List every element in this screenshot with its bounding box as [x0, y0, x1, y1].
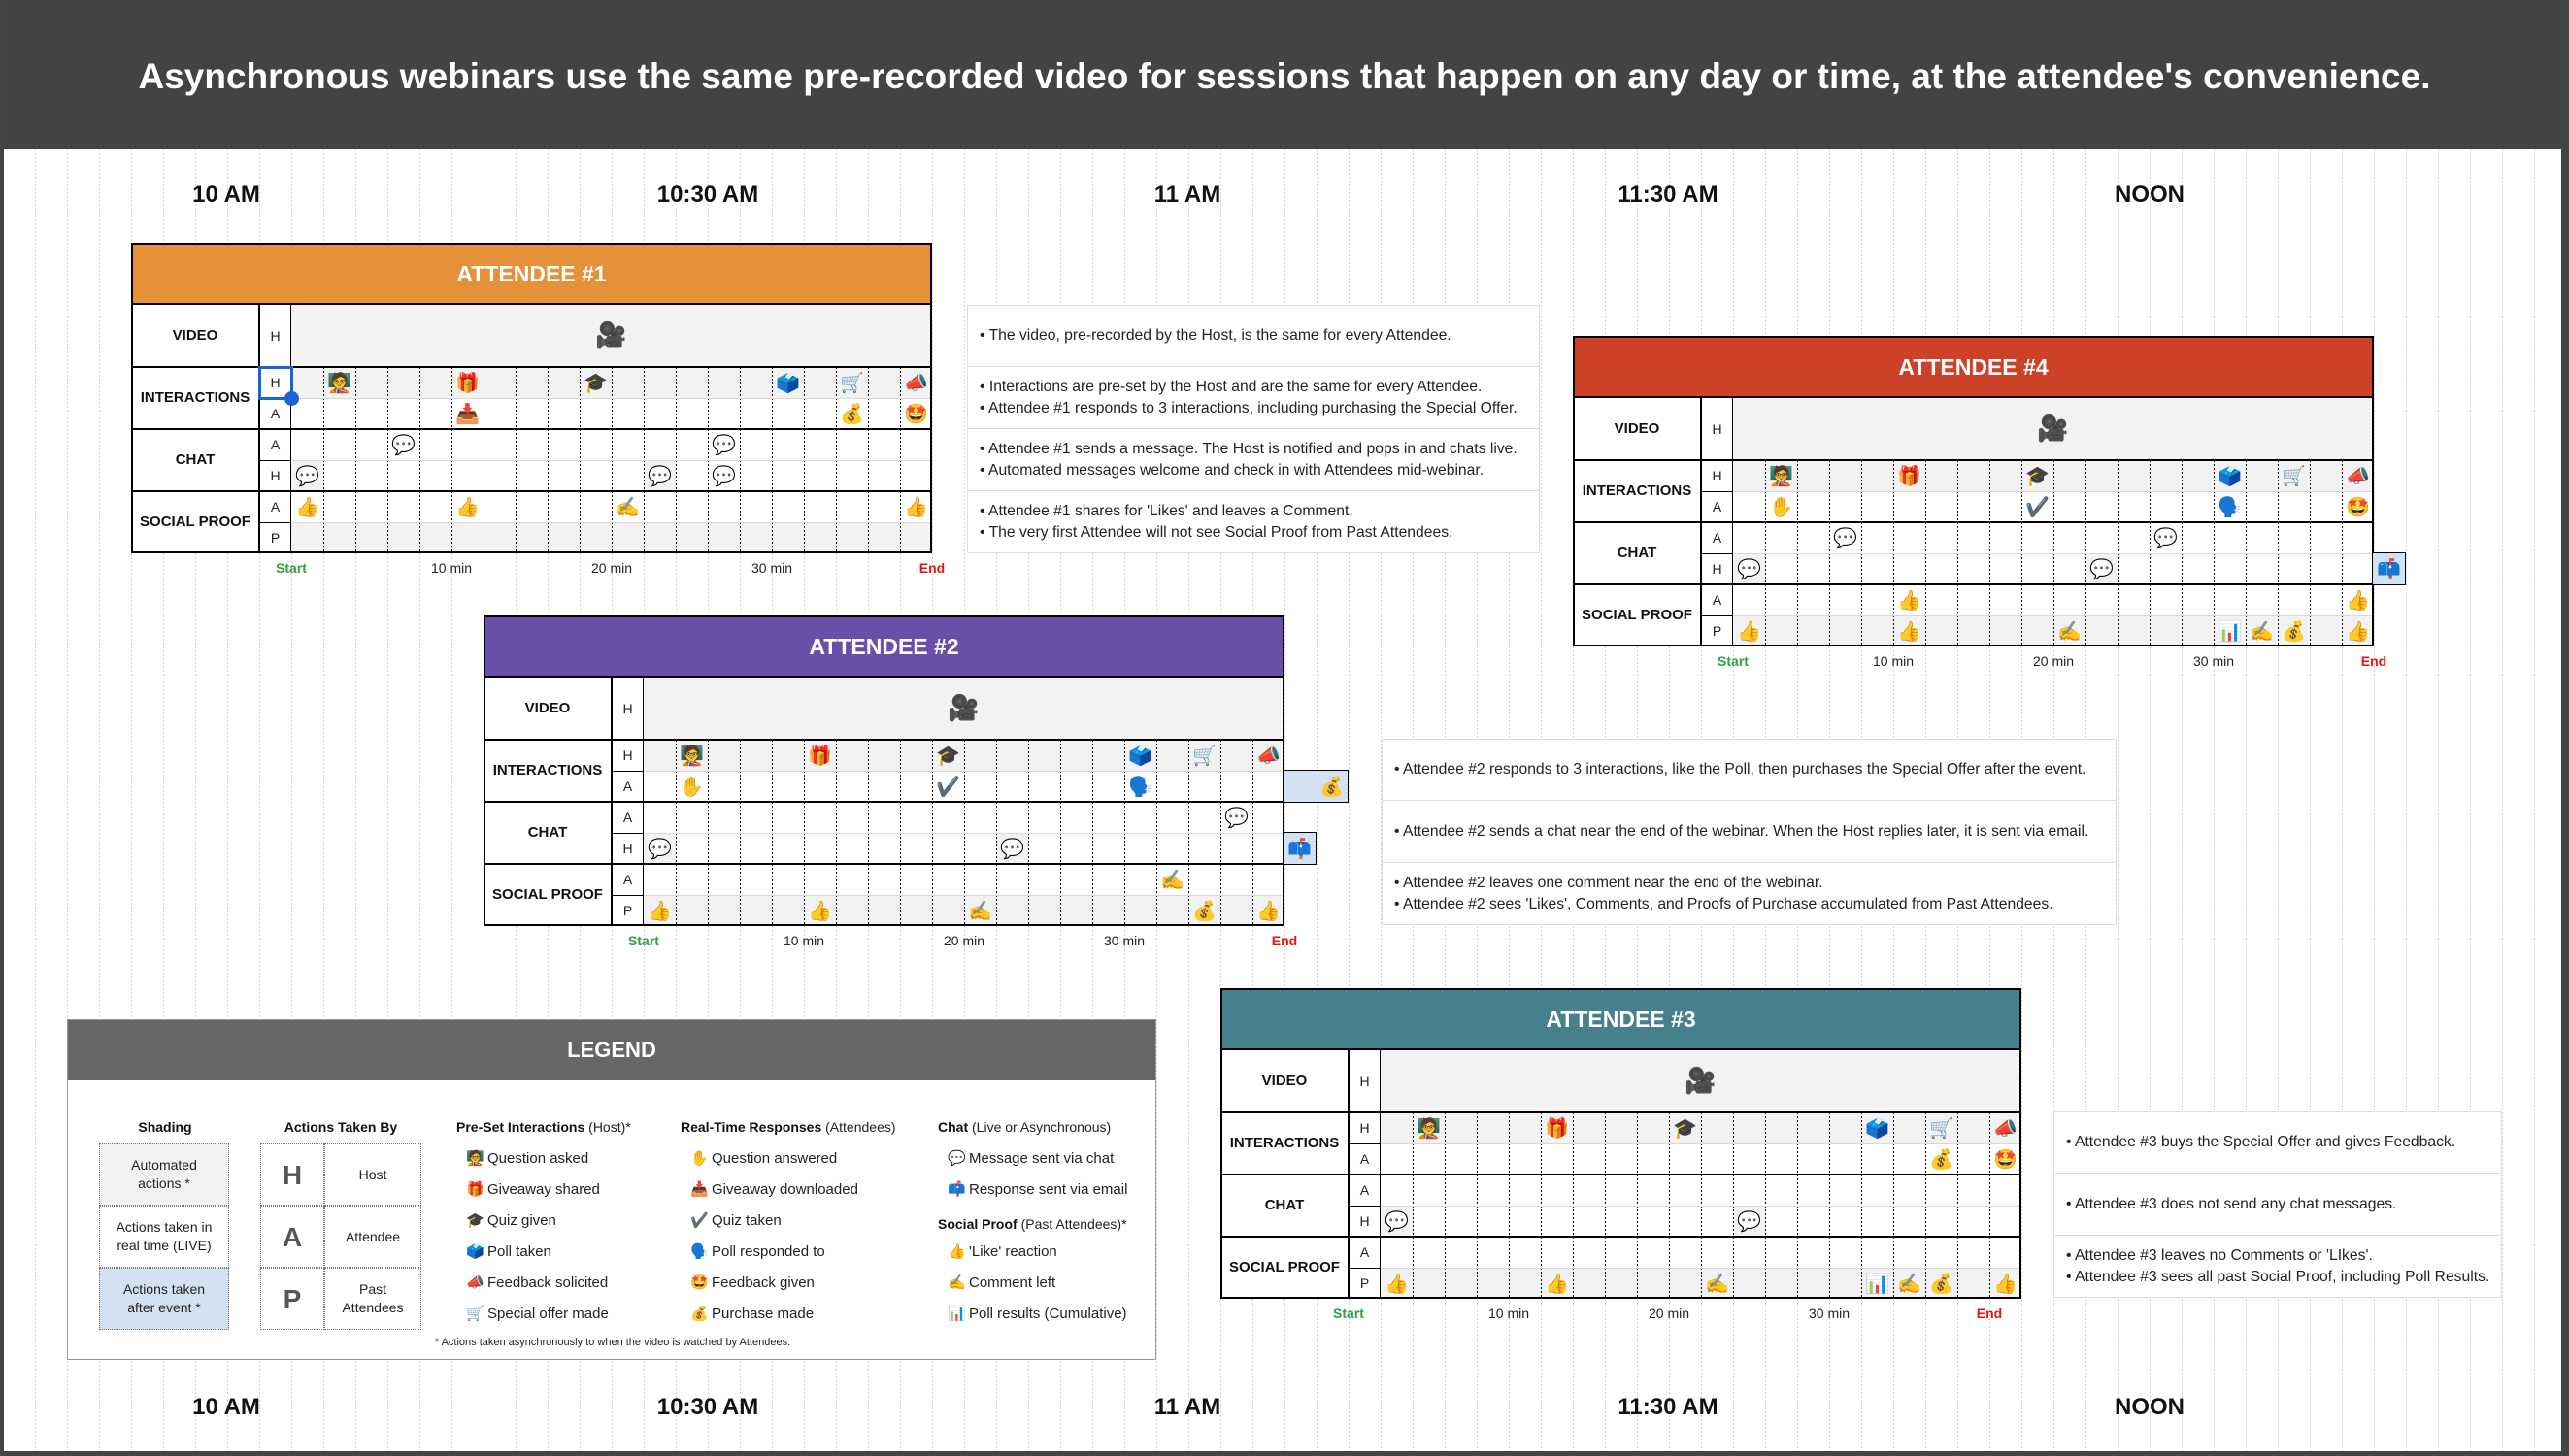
panel: attendee 1: CHAT — [176, 451, 215, 468]
panel: attendee 3: 👍 — [1385, 1272, 1409, 1295]
text: 20 min — [591, 560, 632, 576]
time axis top: 10 AM — [192, 182, 260, 208]
panel: attendee 2: INTERACTIONS — [493, 762, 602, 778]
legend: chat and social proof — [938, 1119, 1127, 1322]
text: 💰 — [1319, 775, 1344, 798]
header: attendee 1 — [131, 243, 932, 305]
notes: attendee 1: • Attendee #1 shares for 'Likes' and leaves a Comment. — [980, 503, 1353, 518]
legend: actions taken by: A — [283, 1221, 302, 1252]
panel: attendee 1: A — [271, 437, 280, 452]
time axis bottom: NOON — [2115, 1394, 2185, 1420]
legend: chat and social proof: 'Like' reaction — [969, 1243, 1057, 1260]
time axis top: 10:30 AM — [657, 182, 758, 208]
legend: real-time responses: 🤩 — [690, 1274, 709, 1291]
legend: pre-set interactions: Question asked — [487, 1150, 588, 1167]
panel: attendee 4: ✋ — [1769, 495, 1793, 518]
panel: attendee 1 — [131, 243, 932, 553]
header: attendee 3 — [1220, 988, 2021, 1050]
legend: chat and social proof: 📫 — [948, 1180, 966, 1198]
time axis top: 11 AM — [1154, 182, 1220, 208]
panel: attendee 2: A — [623, 810, 632, 825]
panel: attendee 1: SOCIAL PROOF — [140, 513, 250, 530]
panel: attendee 1: 🧑‍🏫 — [327, 371, 351, 394]
legend: shading: Actions taken in — [117, 1219, 212, 1235]
header: attendee 4 — [1573, 336, 2374, 398]
text: Start — [276, 560, 307, 576]
panel: attendee 3 — [1220, 988, 2021, 1299]
panel: attendee 1: VIDEO — [173, 327, 217, 344]
text: 30 min — [1104, 933, 1145, 948]
panel: attendee 4: 🎥 — [2037, 414, 2069, 444]
panel: attendee 2: 💬 — [1000, 837, 1024, 860]
panel: attendee 2: 🎥 — [948, 694, 980, 723]
text: 10 min — [1488, 1306, 1529, 1321]
text: 30 min — [1809, 1306, 1850, 1321]
text: Start — [628, 933, 659, 948]
notes: attendee 1: • The very first Attendee will not see Social Proof from Past Attendees. — [980, 524, 1452, 540]
legend: real-time responses: Giveaway downloaded — [712, 1181, 858, 1198]
legend: chat and social proof: Social Proof (Past Attendees)* — [938, 1216, 1127, 1232]
legend: chat and social proof: Message sent via chat — [969, 1150, 1114, 1167]
panel: attendee 4: 📣 — [2346, 464, 2370, 487]
legend: real-time responses — [681, 1119, 896, 1322]
text: 10 min — [431, 560, 472, 576]
panel: attendee 2: VIDEO — [525, 700, 570, 716]
panel: attendee 2: 🗣️ — [1128, 775, 1152, 798]
panel: attendee 4: 🎁 — [1897, 464, 1921, 487]
legend: pre-set interactions: 🎁 — [466, 1180, 484, 1198]
panel: attendee 2: 💬 — [1224, 806, 1249, 829]
panel: attendee 1: 💬 — [712, 433, 736, 456]
panel: legend — [67, 1019, 1156, 1360]
panel: attendee 1: 💬 — [295, 464, 319, 487]
text: 📫 — [2377, 557, 2401, 580]
notes: attendee 1: • Automated messages welcome and check in with Attendees mid-webinar. — [980, 462, 1484, 478]
panel: attendee 4: 👍 — [2346, 588, 2370, 612]
panel: attendee 1: 👍 — [295, 495, 319, 518]
panel: attendee 3: A — [1360, 1182, 1369, 1198]
text: 30 min — [2193, 653, 2234, 669]
legend: real-time responses: 💰 — [690, 1305, 709, 1322]
text: Start — [1333, 1306, 1364, 1321]
panel: attendee 4: SOCIAL PROOF — [1582, 607, 1692, 623]
panel: attendee 2: A — [623, 872, 632, 887]
legend: actions taken by: Attendees — [342, 1300, 404, 1315]
panel: attendee 1: 💬 — [391, 433, 416, 456]
panel: attendee 4: ✔ — [2025, 495, 2050, 518]
header: attendee 3: ATTENDEE #3 — [1546, 1007, 1696, 1032]
legend header: LEGEND — [567, 1038, 656, 1062]
panel: attendee 1: 💬 — [648, 464, 672, 487]
panel: attendee 4: 👍 — [2346, 619, 2370, 643]
panel: attendee 1: 🎥 — [595, 321, 627, 350]
text: 20 min — [1649, 1306, 1689, 1321]
legend: actions taken by: H — [283, 1159, 302, 1190]
panel: attendee 4: CHAT — [1618, 545, 1656, 561]
panel: attendee 4: 🤩 — [2346, 495, 2370, 518]
legend: pre-set interactions: 🗳️ — [466, 1242, 484, 1260]
panel: attendee 4: H — [1712, 421, 1722, 437]
panel: attendee 2: H — [622, 747, 633, 763]
panel: attendee 4: 💬 — [1833, 526, 1857, 549]
panel: attendee 4: 👍 — [1897, 588, 1921, 612]
legend: actions taken by — [260, 1119, 421, 1330]
panel: attendee 2: P — [623, 903, 632, 918]
legend: chat and social proof: Poll results (Cumulative) — [969, 1306, 1127, 1322]
panel: attendee 1: 📣 — [904, 371, 928, 394]
legend: chat and social proof: Chat (Live or Asynchronous) — [938, 1119, 1111, 1135]
panel: attendee 4: H — [1712, 468, 1722, 483]
legend: real-time responses: 🗣️ — [690, 1242, 709, 1260]
panel: attendee 3: 🎓 — [1673, 1116, 1697, 1140]
legend: chat and social proof: 📊 — [948, 1305, 966, 1322]
panel: attendee 1: 🛒 — [840, 371, 864, 394]
panel: attendee 2: 💰 — [1192, 899, 1217, 922]
legend: chat and social proof: 💬 — [948, 1149, 966, 1167]
legend: real-time responses: 📥 — [690, 1180, 709, 1198]
panel: attendee 3: 👍 — [1545, 1272, 1569, 1295]
notes: attendee 1 — [967, 305, 1540, 553]
legend: chat and social proof: 👍 — [948, 1242, 966, 1260]
panel: attendee 1: 🤩 — [904, 402, 928, 425]
panel: attendee 2: 🎁 — [808, 744, 832, 767]
legend: pre-set interactions: Giveaway shared — [487, 1181, 600, 1198]
panel: attendee 4: ✍️ — [2250, 619, 2274, 643]
panel: attendee 4: 💬 — [2153, 526, 2178, 549]
text: 📫 — [1287, 837, 1312, 860]
panel: attendee 1: H — [270, 375, 281, 390]
header: attendee 1: ATTENDEE #1 — [456, 261, 607, 286]
panel: attendee 3: 🛒 — [1929, 1116, 1953, 1140]
panel: attendee 2: 🎓 — [936, 744, 960, 767]
panel: attendee 2 — [484, 615, 1284, 926]
panel: attendee 4: 🗳️ — [2218, 464, 2242, 487]
panel: attendee 2: CHAT — [528, 824, 567, 841]
text: 30 min — [751, 560, 792, 576]
panel: attendee 1: 👍 — [455, 495, 480, 518]
panel: attendee 3: 💰 — [1929, 1272, 1953, 1295]
legend: pre-set interactions: Special offer made — [487, 1306, 609, 1322]
notes: attendee 3: • Attendee #3 does not send any chat messages. — [2066, 1196, 2396, 1211]
panel: attendee 2: 👍 — [1256, 899, 1281, 922]
panel: attendee 2: ✍️ — [1160, 868, 1184, 891]
text: 10 min — [1873, 653, 1914, 669]
panel: attendee 3: H — [1359, 1074, 1370, 1089]
panel: attendee 2: 👍 — [648, 899, 672, 922]
panel: attendee 2: 🛒 — [1192, 744, 1217, 767]
panel: attendee 4: 💬 — [1737, 557, 1761, 580]
legend: shading — [99, 1119, 229, 1330]
notes: attendee 2: • Attendee #2 leaves one comment near the end of the webinar. — [1394, 874, 1823, 891]
panel: attendee 2: 💬 — [648, 837, 672, 860]
panel: attendee 4: A — [1713, 592, 1721, 608]
legend: real-time responses: Poll responded to — [712, 1243, 825, 1260]
legend: pre-set interactions: Quiz given — [487, 1212, 556, 1229]
legend: shading: actions * — [138, 1175, 190, 1191]
panel: attendee 1: 💬 — [712, 464, 736, 487]
text: End — [1272, 933, 1297, 948]
panel: attendee 4: A — [1713, 530, 1721, 546]
legend: shading: after event * — [127, 1300, 201, 1315]
time axis bottom: 10:30 AM — [657, 1394, 758, 1420]
panel: attendee 4: 📊 — [2218, 619, 2242, 643]
panel: attendee 3: 🗳️ — [1865, 1116, 1889, 1140]
panel: attendee 1: 🎁 — [455, 371, 480, 394]
panel: attendee 1: 📥 — [455, 402, 480, 425]
legend: actions taken by: Past — [359, 1281, 386, 1297]
panel: attendee 1: 👍 — [904, 495, 928, 518]
panel: attendee 1: A — [271, 499, 280, 514]
legend: actions taken by: Attendee — [346, 1229, 400, 1244]
notes: attendee 2: • Attendee #2 sees 'Likes', Comments, and Proofs of Purchase accumulated from Past Attendees. — [1394, 895, 2053, 912]
panel: attendee 3: 📊 — [1865, 1272, 1889, 1295]
notes: attendee 2: • Attendee #2 sends a chat near the end of the webinar. When the Host replies later, it is sent via email. — [1394, 823, 2088, 839]
time axis top: NOON — [2115, 182, 2185, 208]
time axis bottom: 11:30 AM — [1618, 1394, 1718, 1420]
panel: attendee 3: 📣 — [1993, 1116, 2018, 1140]
panel: attendee 1: 🗳️ — [776, 371, 800, 394]
panel: attendee 3: 🤩 — [1993, 1147, 2018, 1171]
panel: attendee 3: 👍 — [1993, 1272, 2018, 1295]
panel: attendee 3: CHAT — [1265, 1197, 1304, 1213]
panel: attendee 2: 🧑‍🏫 — [680, 744, 704, 767]
legend: actions taken by: Actions Taken By — [284, 1119, 397, 1135]
legend: real-time responses: Feedback given — [712, 1274, 815, 1291]
panel: attendee 4: INTERACTIONS — [1583, 482, 1691, 499]
panel: attendee 4: P — [1713, 623, 1721, 639]
panel: attendee 4: 👍 — [1897, 619, 1921, 643]
panel: attendee 2: 📣 — [1256, 744, 1281, 767]
legend header — [68, 1020, 1155, 1080]
panel: attendee 2: H — [622, 701, 633, 716]
text: 20 min — [2033, 653, 2074, 669]
legend: pre-set interactions: 🎓 — [466, 1211, 484, 1229]
panel: attendee 2: 🗳️ — [1128, 744, 1152, 767]
panel: attendee 3: VIDEO — [1262, 1073, 1307, 1089]
legend: chat and social proof: ✍️ — [948, 1274, 966, 1291]
panel: attendee 2: SOCIAL PROOF — [492, 886, 603, 903]
panel: attendee 4: 👍 — [1737, 619, 1761, 643]
panel: attendee 3: INTERACTIONS — [1230, 1135, 1339, 1151]
panel: attendee 3: 💬 — [1385, 1209, 1409, 1233]
notes: attendee 3 — [2053, 1111, 2502, 1298]
panel: attendee 3: 💬 — [1737, 1209, 1761, 1233]
notes: attendee 1: • Attendee #1 sends a message. The Host is notified and pops in and chats live. — [980, 441, 1518, 456]
panel: attendee 4: 🗣️ — [2218, 495, 2242, 518]
header: attendee 4: ATTENDEE #4 — [1898, 354, 2049, 380]
legend footnote: * Actions taken asynchronously to when the video is watched by Attendees. — [435, 1337, 790, 1348]
panel: attendee 3: SOCIAL PROOF — [1229, 1259, 1340, 1275]
text: End — [2361, 653, 2386, 669]
legend: real-time responses: Purchase made — [712, 1306, 814, 1322]
panel: attendee 3: 🧑‍🏫 — [1417, 1116, 1441, 1140]
panel: attendee 4: ✍️ — [2057, 619, 2082, 643]
text: Start — [1718, 653, 1749, 669]
panel: attendee 2: H — [622, 841, 633, 856]
notes: attendee 2: • Attendee #2 responds to 3 interactions, like the Poll, then purchases the Special Offer after the event. — [1394, 761, 2085, 778]
notes: attendee 1: • Attendee #1 responds to 3 interactions, including purchasing the Special Offer. — [980, 400, 1518, 415]
panel: attendee 1: P — [271, 530, 280, 546]
legend: actions taken by: Host — [359, 1167, 386, 1182]
panel: attendee 2: ✋ — [680, 775, 704, 798]
legend: real-time responses: Real-Time Responses (Attendees) — [681, 1119, 896, 1135]
panel: attendee 4 — [1573, 336, 2374, 646]
panel: attendee 2: A — [623, 778, 632, 794]
text: End — [1977, 1306, 2002, 1321]
legend: shading: Shading — [138, 1119, 192, 1135]
legend: actions taken by: P — [284, 1283, 301, 1314]
panel: attendee 4: 💰 — [2282, 619, 2306, 643]
time axis bottom: 10 AM — [192, 1394, 260, 1420]
panel: attendee 1: H — [270, 468, 281, 483]
legend: shading: real time (LIVE) — [117, 1238, 212, 1253]
panel: attendee 3: A — [1360, 1244, 1369, 1260]
header: attendee 2 — [484, 615, 1284, 678]
panel: attendee 3: 🎁 — [1545, 1116, 1569, 1140]
title banner — [0, 0, 2569, 149]
panel: attendee 4: A — [1713, 499, 1721, 514]
panel: attendee 3: A — [1360, 1151, 1369, 1167]
time axis top — [192, 182, 2185, 208]
panel: attendee 4: 🎓 — [2025, 464, 2050, 487]
legend: pre-set interactions: 📣 — [466, 1274, 484, 1291]
panel: attendee 3: H — [1359, 1213, 1370, 1229]
title banner: Asynchronous webinars use the same pre-recorded video for sessions that happen on any day or time, at the attendee's convenience. — [138, 56, 2431, 96]
legend: chat and social proof: Response sent via email — [969, 1181, 1127, 1198]
legend: real-time responses: Quiz taken — [712, 1212, 782, 1229]
notes: attendee 2 — [1382, 739, 2117, 925]
panel: attendee 4: 🧑‍🏫 — [1769, 464, 1793, 487]
header: attendee 2: ATTENDEE #2 — [809, 634, 959, 659]
legend: pre-set interactions: Pre-Set Interactions (Host)* — [456, 1119, 631, 1135]
legend: pre-set interactions: Poll taken — [487, 1243, 551, 1260]
legend: chat and social proof: Comment left — [969, 1274, 1055, 1291]
panel: attendee 1: 💰 — [840, 402, 864, 425]
time axis bottom: 11 AM — [1154, 1394, 1220, 1420]
legend: pre-set interactions — [456, 1119, 631, 1322]
panel: attendee 3: P — [1360, 1275, 1369, 1291]
panel: attendee 2: 👍 — [808, 899, 832, 922]
legend: shading: Actions taken — [123, 1281, 205, 1297]
text: End — [919, 560, 945, 576]
notes: attendee 1: • Interactions are pre-set by the Host and are the same for every Attendee. — [980, 379, 1482, 394]
panel: attendee 1: A — [271, 406, 280, 421]
panel: attendee 4: 💬 — [2089, 557, 2114, 580]
panel: attendee 3: ✍️ — [1897, 1272, 1921, 1295]
legend: real-time responses: ✔ — [690, 1211, 709, 1229]
panel: attendee 1: ✍️ — [616, 495, 640, 518]
notes: attendee 3: • Attendee #3 leaves no Comments or 'LIkes'. — [2066, 1246, 2373, 1264]
panel: attendee 3: 🎥 — [1685, 1067, 1717, 1096]
text: 10 min — [784, 933, 824, 948]
legend: real-time responses: Question answered — [712, 1150, 837, 1167]
panel: attendee 3: H — [1359, 1120, 1370, 1136]
legend: pre-set interactions: Feedback solicited — [487, 1274, 608, 1291]
notes: attendee 3: • Attendee #3 sees all past Social Proof, including Poll Results. — [2066, 1268, 2489, 1285]
panel: attendee 1: 🎓 — [584, 371, 608, 394]
notes: attendee 1: • The video, pre-recorded by the Host, is the same for every Attendee. — [980, 327, 1451, 344]
panel: attendee 4: VIDEO — [1615, 420, 1659, 437]
legend: pre-set interactions: 🛒 — [466, 1305, 484, 1322]
panel: attendee 3: 💰 — [1929, 1147, 1953, 1171]
text: 20 min — [944, 933, 984, 948]
panel: attendee 4: 🛒 — [2282, 464, 2306, 487]
time axis bottom — [192, 1394, 2185, 1420]
legend: shading: Automated — [131, 1157, 197, 1173]
panel: attendee 3: ✍️ — [1705, 1272, 1729, 1295]
panel: attendee 2: ✍️ — [968, 899, 992, 922]
time axis top: 11:30 AM — [1618, 182, 1718, 208]
panel: attendee 4: H — [1712, 561, 1722, 577]
legend: pre-set interactions: 🧑‍🏫 — [466, 1149, 484, 1167]
notes: attendee 3: • Attendee #3 buys the Special Offer and gives Feedback. — [2066, 1134, 2455, 1150]
legend: real-time responses: ✋ — [690, 1149, 709, 1167]
panel: attendee 2: ✔ — [936, 775, 960, 798]
panel: attendee 1: INTERACTIONS — [141, 389, 250, 406]
panel: attendee 1: H — [270, 328, 281, 344]
